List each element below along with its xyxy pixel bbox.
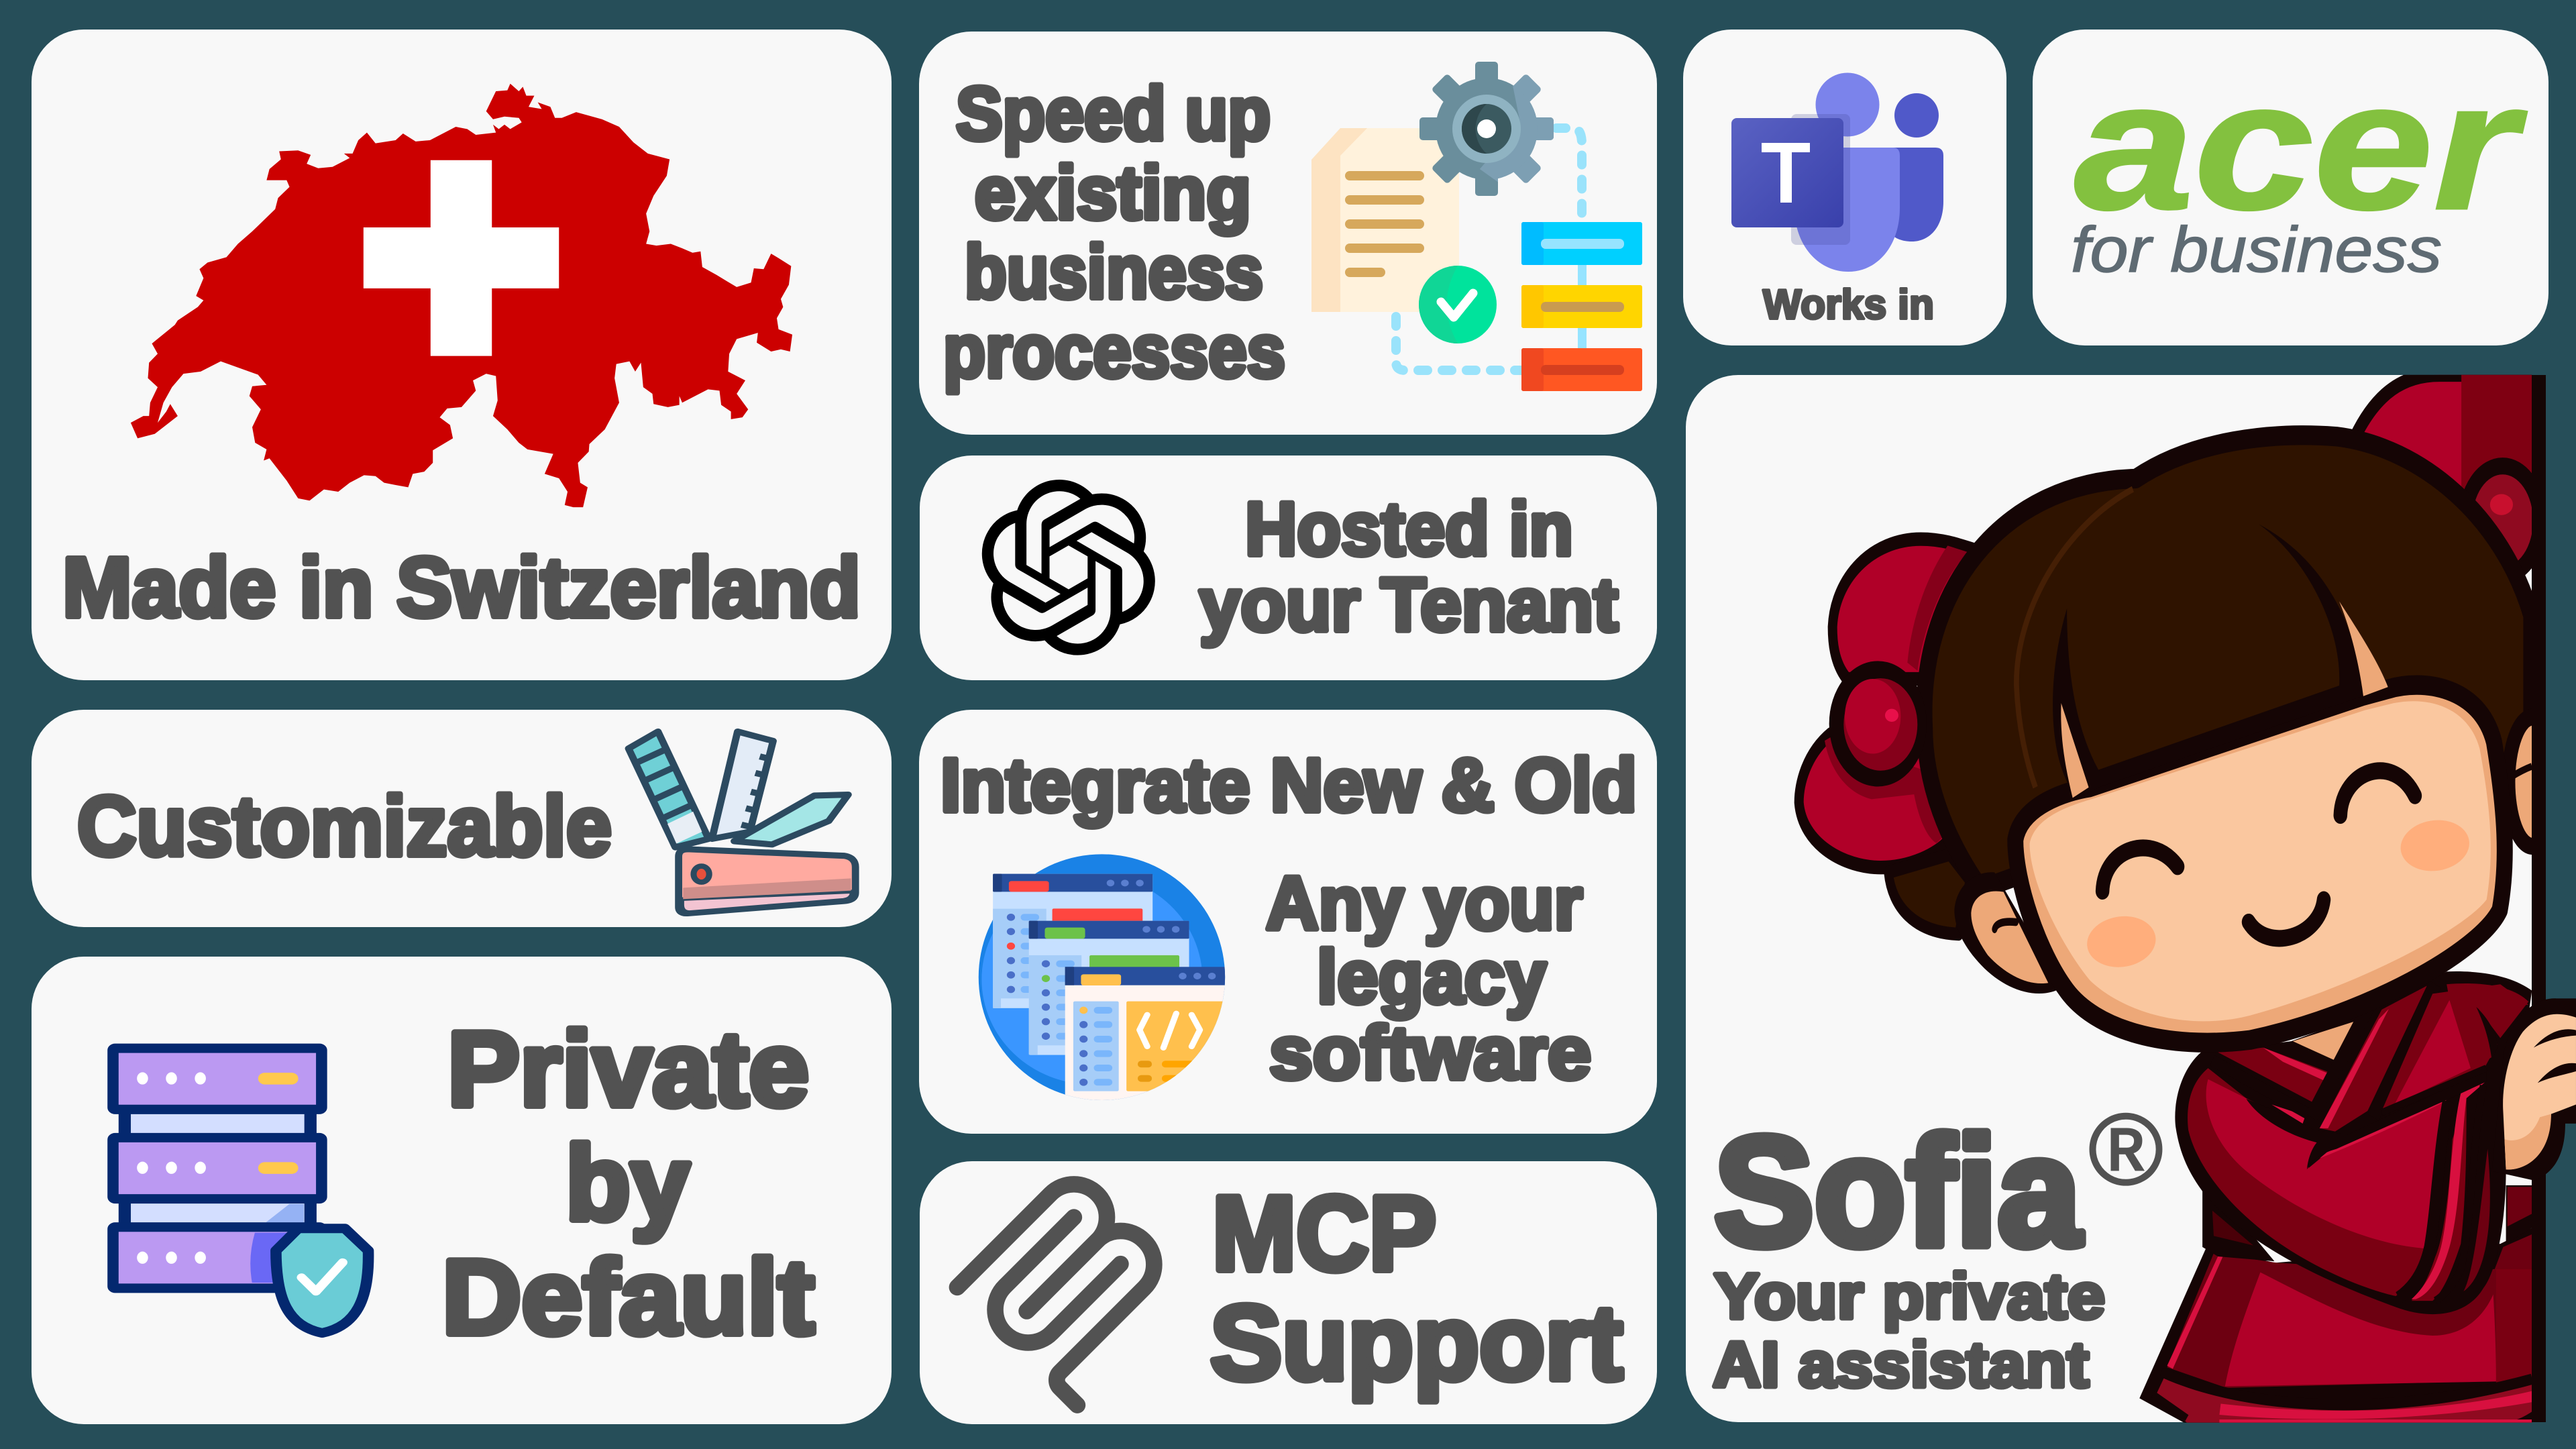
heading: private by default: Default [442,1238,814,1356]
icon: workflow document, gear and steps [1311,62,1642,391]
label: works in: Works in [1763,282,1934,328]
icon: teams logo [1731,72,1943,272]
heading: customizable: Customizable [77,779,612,873]
panel: acer for business [2033,30,2548,345]
panel: works in teams [1683,30,2006,345]
panel: speed up processes [919,32,1657,435]
heading: integrate new and old: Integrate New & Old [941,743,1637,827]
icon: knot logo [982,480,1155,655]
illustration: sofia character [1799,375,2576,1424]
icon: secure server stack [113,1049,368,1333]
icon: mcp logo [957,1184,1154,1405]
heading: hosted in your tenant: Hosted in [1245,487,1573,571]
panel: mcp support [920,1161,1657,1424]
heading: speed up existing business processes: Speed up [956,72,1271,156]
text: any your legacy software: software [1269,1011,1591,1095]
panel: private by default [32,957,892,1424]
heading: private by default: Private [447,1010,809,1128]
panel: sofia assistant [1686,375,2576,1424]
icon: multi-tool [629,732,855,913]
heading: sofia: Sofia [1714,1105,2082,1279]
label: for business: for business [2071,214,2442,286]
heading: hosted in your tenant [1199,487,1618,647]
text: any your legacy software: Any your [1266,861,1582,945]
heading: private by default: by [566,1124,690,1242]
heading: mcp support: MCP [1212,1175,1436,1293]
heading: speed up existing business processes [943,72,1285,393]
tagline: your private ai assistant: Your private [1714,1260,2105,1332]
panel: made in switzerland [32,30,892,680]
icon: stacked code windows [979,854,1230,1102]
tagline: your private ai assistant: AI assistant [1713,1329,2089,1401]
icon: swiss map with cross [131,84,792,507]
heading: private by default [442,1010,814,1356]
heading: mcp support: Support [1210,1284,1623,1402]
panel: customizable [32,710,892,927]
registered mark: ® [2089,1093,2163,1205]
text: any your legacy software: legacy [1317,935,1546,1019]
panel: integrate new and old [919,710,1657,1134]
heading: speed up existing business processes: existing [975,151,1251,235]
heading: speed up existing business processes: processes [943,309,1285,393]
heading: hosted in your tenant: your Tenant [1199,563,1618,647]
panel: hosted in your tenant [920,455,1657,680]
heading: speed up existing business processes: business [965,230,1263,314]
heading: mcp support [1210,1175,1623,1402]
logo: acer: acer [2074,44,2528,248]
tagline: your private ai assistant [1713,1260,2105,1401]
text: any your legacy software [1266,861,1591,1095]
heading: made in switzerland: Made in Switzerland [62,540,861,635]
